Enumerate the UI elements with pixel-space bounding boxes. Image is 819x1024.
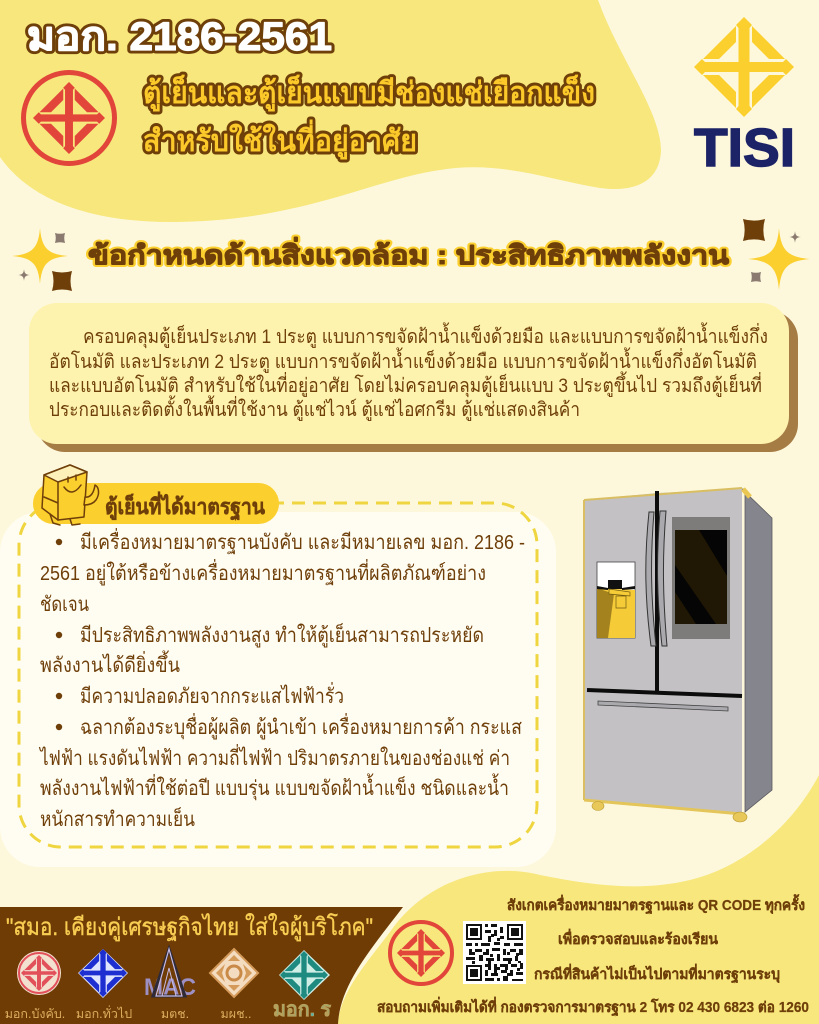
S mark wordmark: มอก. ร [273, 999, 331, 1021]
bottom-right yellow blob [338, 775, 819, 1024]
icon: MAC tower [144, 949, 196, 1001]
icon: community mark [210, 949, 258, 997]
list text: มีเครื่องหมายมาตรฐานบังคับ และมีหมายเลข มอก. 2186 - [80, 528, 525, 554]
footer brown banner [0, 907, 403, 1024]
footer labels [5, 1005, 252, 1021]
logo wordmark: TISI [694, 118, 795, 178]
icon: MAC tower: MAC [144, 974, 196, 1001]
water dispenser [597, 562, 635, 638]
scope text: ประกอบและติดตั้งในพื้นที่ใช้งาน ตู้แช่ไวน์ ตู้แช่ไอศกรีม ตู้แช่แสดงสินค้า [49, 395, 580, 422]
scope text [49, 322, 768, 422]
icon: fridge mascot [42, 465, 99, 525]
list text: ไฟฟ้า แรงดันไฟฟ้า ความถี่ไฟฟ้า ปริมาตรภายในของช่องแช่ ค่า [38, 744, 510, 770]
footer labels: มอก.บังคับ. [5, 1007, 65, 1021]
icon: general mark [78, 949, 128, 998]
footer slogan: "สมอ. เคียงคู่เศรษฐกิจไทย ใส่ใจผู้บริโภค" [6, 913, 373, 942]
list text: พลังงานไฟฟ้าที่ใช้ต่อปี แบบรุ่น แบบขจัดฝ้าน้ำแข็ง ชนิดและน้ำ [40, 773, 509, 801]
fridge feet [592, 802, 747, 822]
icon: mandatory mark [17, 951, 61, 995]
icon: red TISI seal [24, 72, 114, 164]
icon: TISI logo [694, 17, 795, 178]
list text: ชัดเจน [40, 593, 89, 616]
illustration: refrigerator [584, 488, 772, 822]
icon: red seal footer [390, 922, 452, 984]
footer information text: สังเกตเครื่องหมายมาตรฐานและ QR CODE ทุกครั้ง [507, 894, 805, 915]
scope text: อัตโนมัติ และประเภท 2 ประตู แบบการขจัดฝ้าน้ำแข็งด้วยมือ แบบการขจัดฝ้าน้ำแข็งกึ่งอัตโนมัติ [49, 347, 757, 374]
icon: S mark [273, 950, 331, 1021]
list heading pill: ตู้เย็นที่ได้มาตรฐาน [105, 491, 265, 521]
footer labels: มตช. [161, 1007, 189, 1021]
footer information text: กรณีที่สินค้าไม่เป็นไปตามที่มาตรฐานระบุ [534, 963, 780, 984]
list text: พลังงานได้ดียิ่งขึ้น [40, 650, 180, 677]
list text: ฉลากต้องระบุชื่อผู้ผลิต ผู้นำเข้า เครื่องหมายการค้า กระแส [80, 713, 522, 740]
QR code [463, 921, 526, 984]
list heading pill [33, 483, 279, 524]
heading: ข้อกำหนดด้านสิ่งแวดล้อม : ประสิทธิภาพพลังงาน [88, 236, 729, 270]
subtitle: สำหรับใช้ในที่อยู่อาศัย [143, 119, 417, 160]
list text: มีความปลอดภัยจากกระแสไฟฟ้ารั่ว [80, 682, 344, 708]
panel: certified fridge list [0, 503, 556, 867]
sparkles: right [743, 219, 810, 290]
panel: scope description [29, 303, 798, 452]
heading: ข้อกำหนดด้านสิ่งแวดล้อม : ประสิทธิภาพพลังงาน [88, 236, 729, 270]
list text: หนักสารทำความเย็น [40, 805, 195, 831]
title: มอก. 2186-2561 [27, 15, 332, 59]
top yellow blob [0, 0, 661, 222]
list text: 2561 อยู่ใต้หรือข้างเครื่องหมายมาตรฐานที่ผลิตภัณฑ์อย่าง [40, 559, 486, 586]
subtitle [143, 74, 595, 160]
list text [38, 528, 525, 831]
sparkles: left [12, 228, 72, 291]
footer information text [377, 894, 809, 1017]
footer labels: มผช.. [220, 1007, 252, 1021]
footer information text: เพื่อตรวจสอบและร้องเรียน [558, 928, 718, 948]
subtitle: ตู้เย็นและตู้เย็นแบบมีช่องแช่เยือกแข็ง [143, 74, 595, 112]
door screen [672, 517, 730, 639]
footer labels: มอก.ทั่วไป [76, 1005, 132, 1021]
list text: มีประสิทธิภาพพลังงานสูง ทำให้ตู้เย็นสามารถประหยัด [80, 621, 484, 648]
title: มอก. 2186-2561 [27, 15, 332, 59]
